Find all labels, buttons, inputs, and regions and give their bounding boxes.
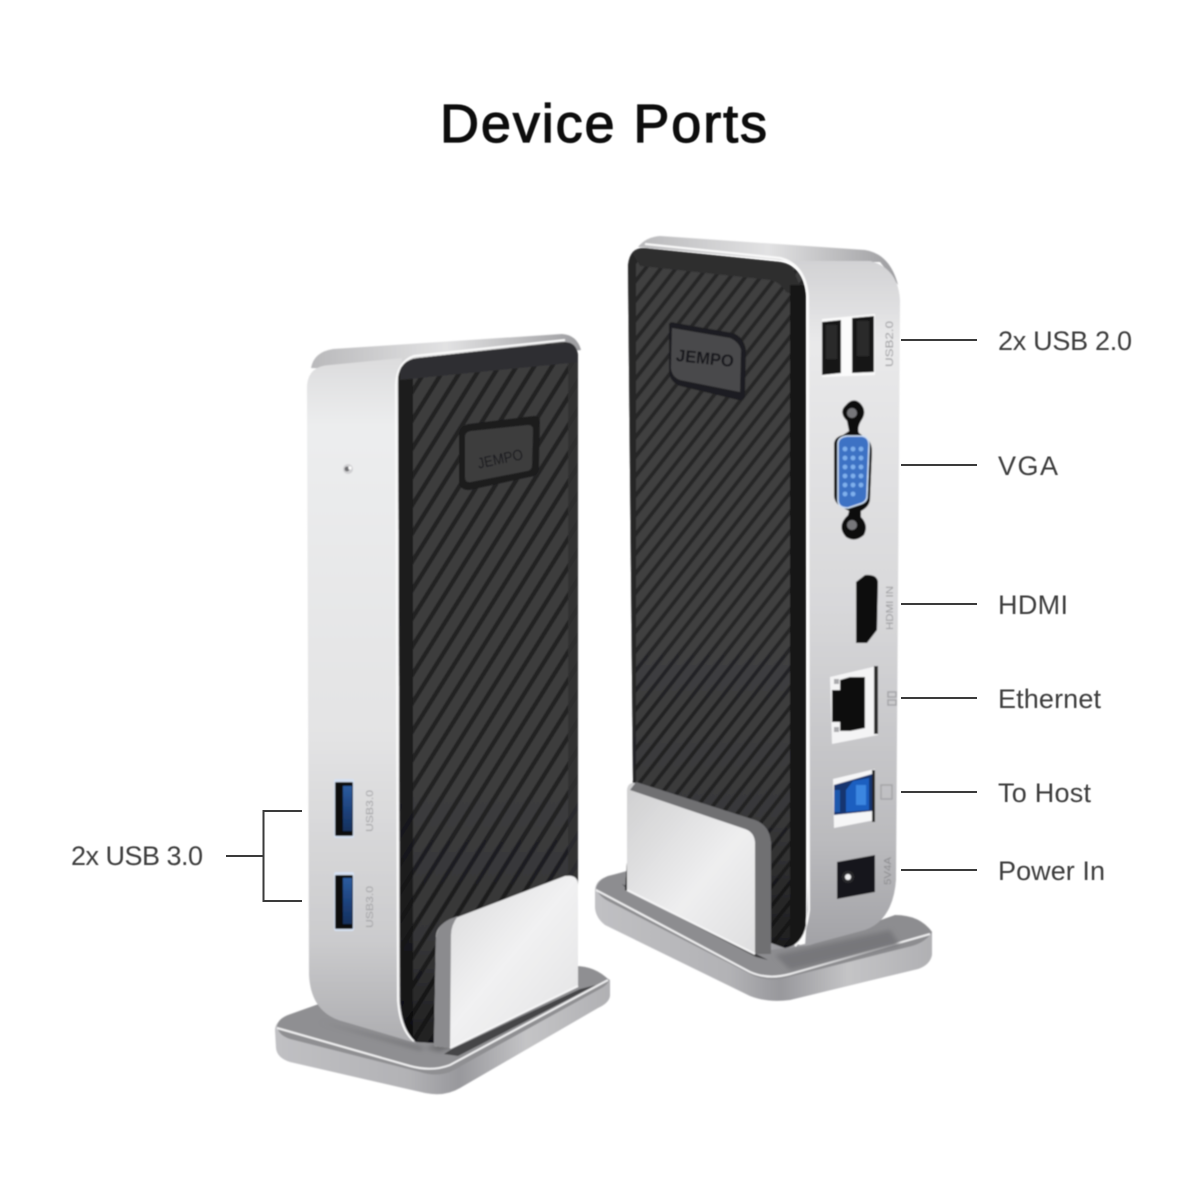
label: 2x USB 3.0: 2x USB 3.0: [71, 841, 203, 871]
top surface: right device: [638, 236, 898, 285]
side highlight edge: [645, 244, 809, 946]
status LED: [343, 464, 353, 474]
label: 2x USB 2.0: 2x USB 2.0: [998, 326, 1132, 356]
port label: USB3.0 top: USB3.0: [365, 789, 376, 832]
stand base: left device: [275, 966, 610, 1094]
port label: USB3.0 bottom: USB3.0: [365, 885, 376, 928]
label: VGA: VGA: [998, 451, 1058, 481]
title: Device Ports: [440, 94, 767, 154]
callout bracket: USB 3.0: [226, 811, 302, 901]
port: USB 3.0 bottom: [334, 872, 354, 931]
port label: 5V: 5V4A: [883, 857, 894, 885]
label: Ethernet: Ethernet: [998, 684, 1101, 714]
ribbed black panel: right device: [620, 245, 810, 955]
port label: LAN icon: [888, 692, 896, 705]
port: USB-B To Host: [833, 769, 875, 828]
ribbed black panel: left device: [395, 335, 588, 1060]
silver side panel: right device: [790, 261, 900, 946]
logo tab: left device: JEMPO: [476, 446, 525, 473]
device: front-side dock (left): [275, 334, 610, 1094]
port: Ethernet: [830, 666, 878, 744]
label: HDMI: HDMI: [998, 590, 1068, 620]
callout lines: right ports: [901, 340, 977, 870]
logo tab: right device: JEMPO: [675, 346, 735, 371]
port: USB 2.0 pair: [822, 314, 875, 377]
stand insert: left device: [434, 876, 596, 1056]
port label: USB-B icon: [881, 785, 892, 799]
logo tab: left device: [459, 416, 540, 490]
side highlight edge: [396, 340, 565, 1041]
label: Power In: Power In: [998, 856, 1105, 886]
logo tab: right device: [669, 322, 746, 400]
port: USB 3.0 top: [334, 779, 354, 838]
port: HDMI: [856, 575, 878, 643]
silver side panel: left device: [307, 358, 416, 1043]
device: rear-side dock (right): [595, 236, 932, 1001]
stand base: right device: [595, 871, 932, 1001]
port label: HDMI: HDMI IN: [885, 586, 896, 630]
top surface: left device: [311, 334, 581, 372]
stand insert: right device: [627, 782, 771, 954]
port: VGA: [834, 400, 872, 540]
labels: port names: [71, 326, 1132, 886]
label: To Host: To Host: [998, 778, 1091, 808]
port label: USB2.0: USB2.0: [884, 321, 896, 367]
port: Power In: [837, 855, 875, 899]
